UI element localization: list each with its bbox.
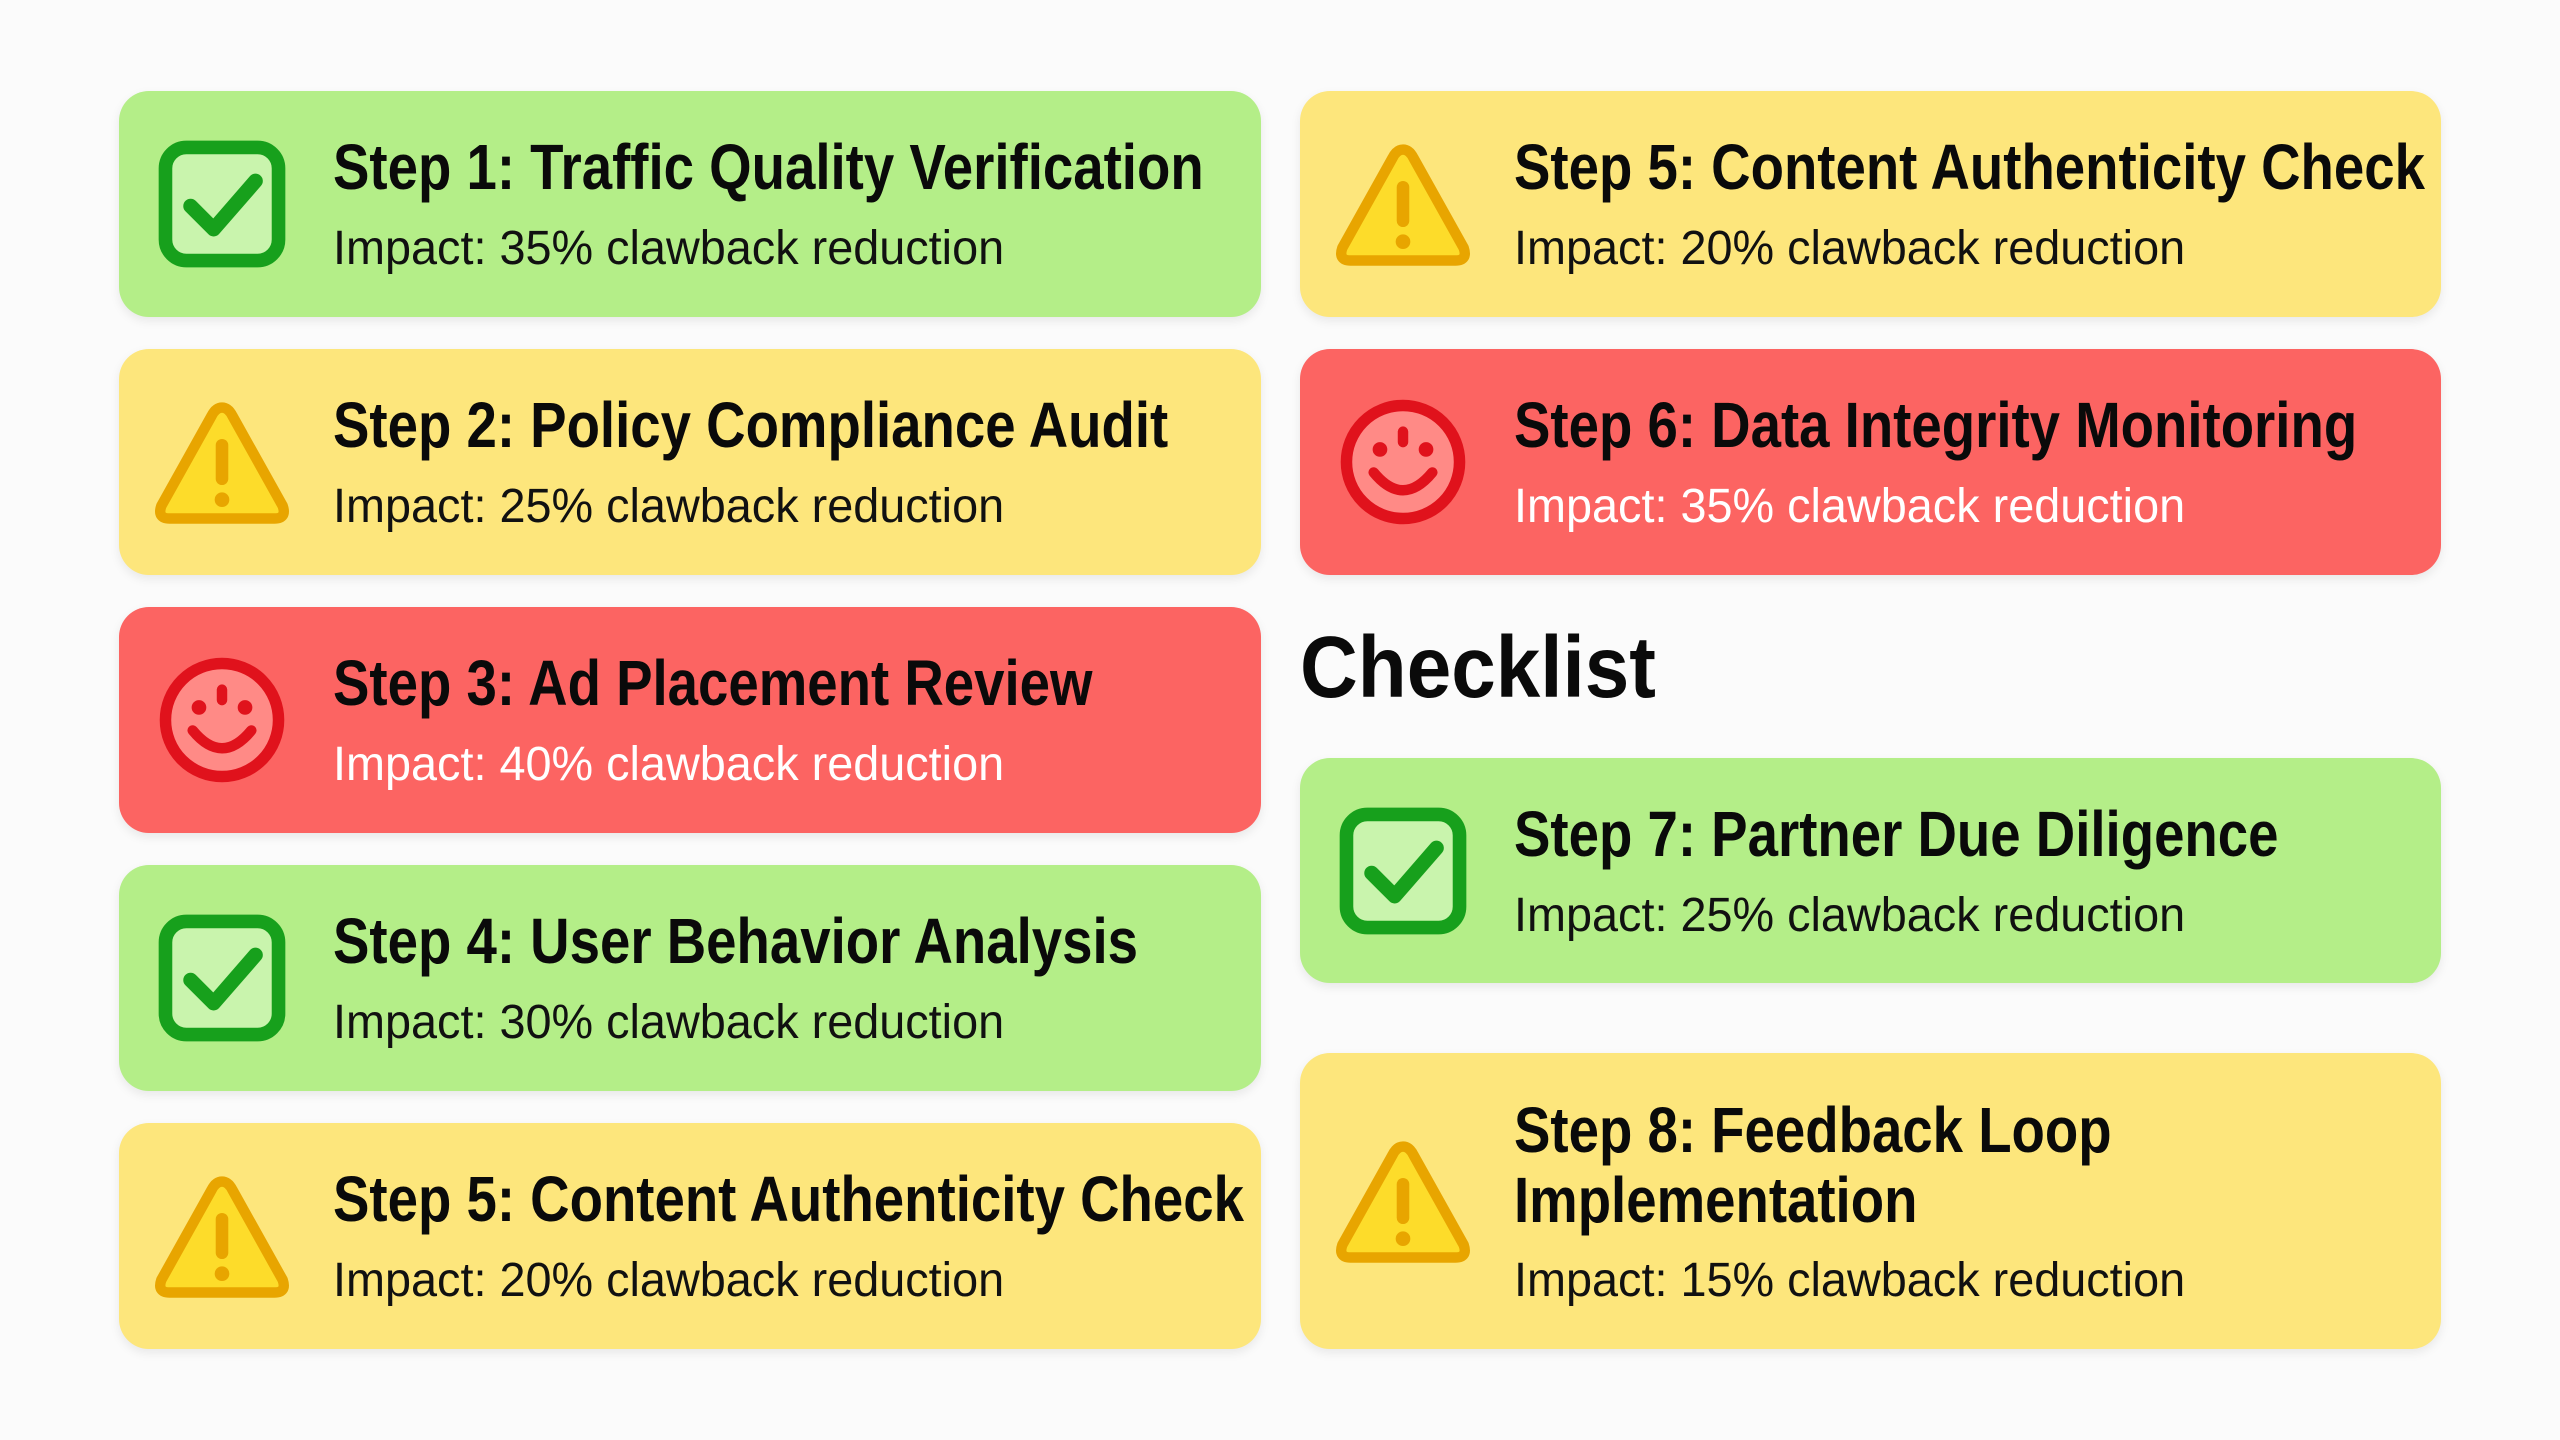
panel: step 4 [119, 865, 1261, 1091]
text: impact 35%: Impact: 35% clawback reduction [333, 222, 1004, 275]
heading: step 4: Step 4: User Behavior Analysis [333, 905, 1138, 977]
panel: step 2 [119, 349, 1261, 575]
icon: smiley [1340, 400, 1466, 524]
panel: step 7 [1300, 758, 2441, 983]
panel: step 1 [119, 91, 1261, 317]
text: impact 15%: Impact: 15% clawback reduction [1514, 1254, 2185, 1307]
icon: checkbox [1340, 808, 1466, 934]
text: impact 25%: Impact: 25% clawback reduction [333, 480, 1004, 533]
icon: checkbox [158, 140, 286, 268]
panel: step 6 [1300, 349, 2441, 575]
heading: step 8: Step 8: Feedback Loop [1514, 1094, 2112, 1166]
heading: step 3: Step 3: Ad Placement Review [333, 647, 1092, 719]
panel: step 5 left [119, 1123, 1261, 1349]
icon: smiley [160, 658, 284, 782]
heading: step 6: Step 6: Data Integrity Monitoring [1514, 389, 2357, 461]
panel: step 3 [119, 607, 1261, 833]
panel: step 8 [1300, 1053, 2441, 1349]
text: impact 25%: Impact: 25% clawback reduction [1514, 889, 2185, 942]
icon: warning [1336, 1141, 1470, 1263]
heading: step 7: Step 7: Partner Due Diligence [1514, 798, 2279, 870]
heading: step 5: Step 5: Content Authenticity Check [1514, 131, 2425, 203]
text: impact 35%: Impact: 35% clawback reduction [1514, 480, 2185, 533]
panel: step 5 right [1300, 91, 2441, 317]
text: impact 20%: Impact: 20% clawback reduction [1514, 222, 2185, 275]
text: impact 30%: Impact: 30% clawback reduction [333, 996, 1004, 1049]
heading: step 8 [1514, 1094, 2112, 1236]
text: impact 20%: Impact: 20% clawback reduction [333, 1254, 1004, 1307]
icon: checkbox [158, 914, 286, 1042]
heading: step 8: Implementation [1514, 1164, 1917, 1236]
text: impact 40%: Impact: 40% clawback reduction [333, 738, 1004, 791]
heading: step 5: Step 5: Content Authenticity Check [333, 1163, 1244, 1235]
icon: warning [1336, 144, 1470, 266]
heading: step 1: Step 1: Traffic Quality Verification [333, 131, 1204, 203]
heading: step 2: Step 2: Policy Compliance Audit [333, 389, 1168, 461]
heading: checklist: Checklist [1300, 619, 1656, 716]
icon: warning [155, 402, 289, 524]
icon: warning [155, 1176, 289, 1298]
